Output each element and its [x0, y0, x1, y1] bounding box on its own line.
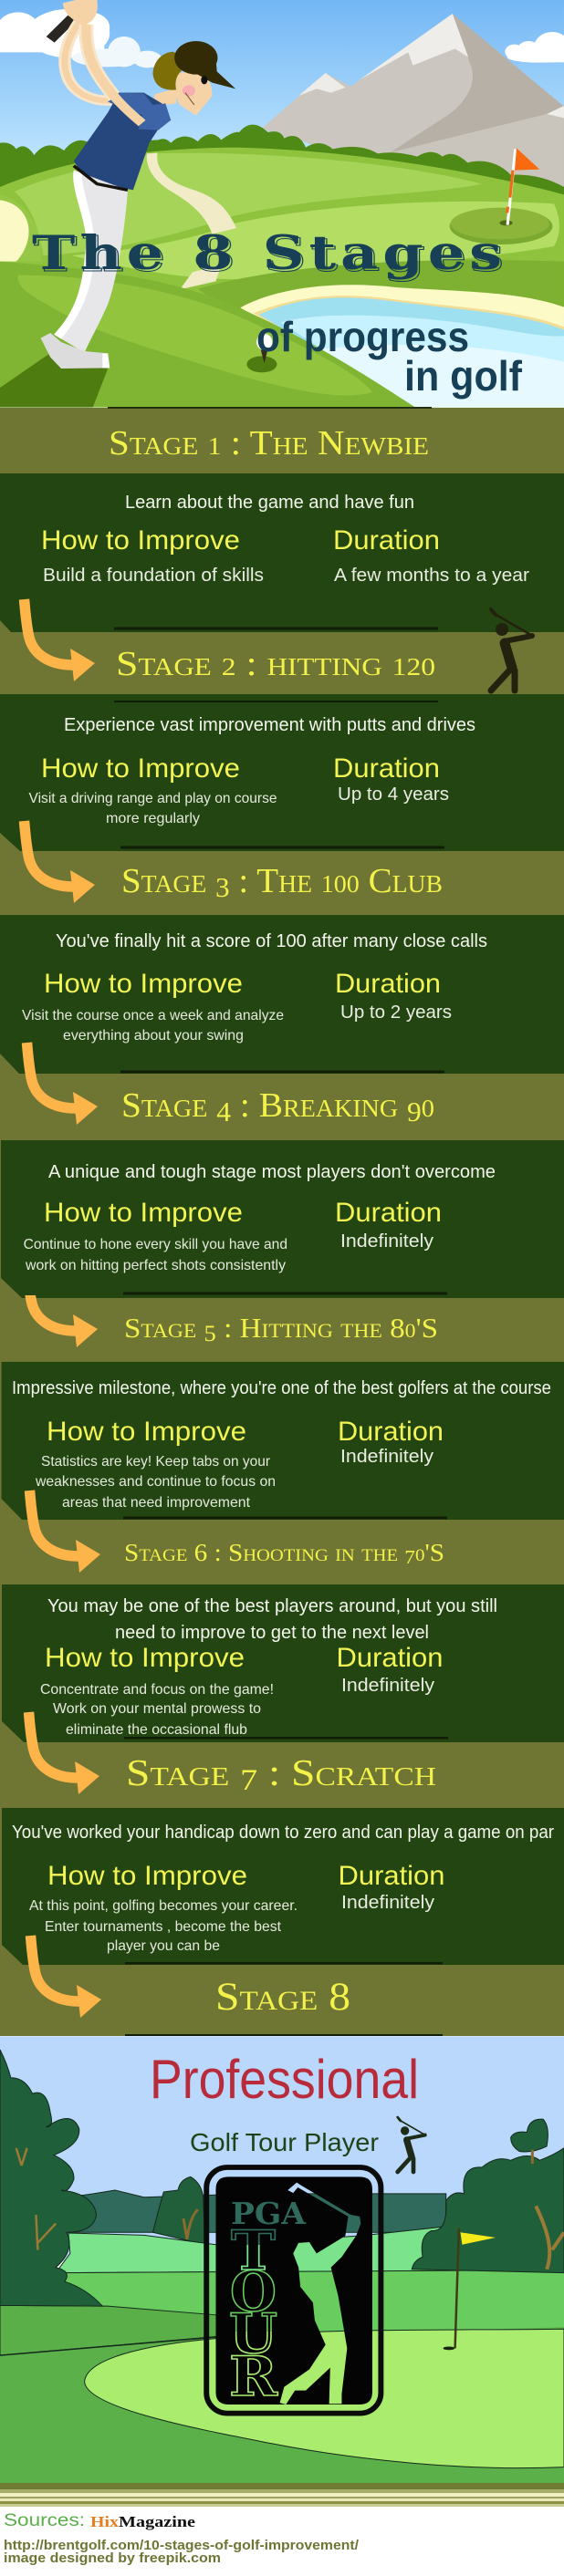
panel: stage 6 details: How to Improve — [45, 1643, 245, 1673]
panel: stage 3 details: everything about your swing — [63, 1028, 244, 1044]
sources line — [4, 2511, 196, 2530]
arrow: stage 5 to 6 — [29, 1491, 100, 1573]
panel: stage 7 details: Indefinitely — [341, 1893, 434, 1913]
panel: stage 2 details: How to Improve — [41, 753, 240, 784]
subtitle: of progress in golf — [256, 313, 523, 400]
panel: stage 7 details — [0, 1808, 564, 1965]
arrow: stage 3 to 4 — [27, 1043, 98, 1125]
panel: stage 5 details — [0, 1362, 564, 1520]
clouds — [0, 9, 564, 68]
panel: stage 4 details: Duration — [335, 1198, 442, 1228]
putting green and flag — [449, 213, 553, 244]
stage 1 heading band — [0, 407, 564, 473]
panel: stage 1 details: Duration — [333, 525, 440, 556]
source credits: image designed by freepik.com — [4, 2550, 221, 2566]
panel: stage 5 details: weaknesses and continue to focus on — [35, 1474, 276, 1490]
panel: stage 2 details: Visit a driving range and play on course — [29, 791, 277, 806]
panel: stage 2 details: Experience vast improvement with putts and drives — [64, 715, 475, 735]
panel: stage 2 details — [0, 694, 564, 851]
stage 1 heading band: Stage 1 : The Newbie — [109, 424, 429, 462]
panel: stage 5 details: Duration — [338, 1417, 444, 1447]
stage 4 heading band: 9 — [407, 1096, 422, 1127]
panel: stage 4 details: How to Improve — [44, 1198, 243, 1228]
panel: stage 7 details: player you can be — [107, 1938, 220, 1954]
PGA Tour logo: PGA — [231, 2196, 306, 2231]
panel: stage 6 details: Indefinitely — [341, 1676, 434, 1696]
sources line: Magazine — [119, 2513, 196, 2530]
stage 4 heading band: Stage — [121, 1086, 204, 1125]
panel: stage 6 details: eliminate the occasional flub — [66, 1722, 247, 1738]
sky — [0, 0, 564, 155]
panel: stage 5 details: Indefinitely — [340, 1447, 433, 1467]
stage 4 heading band — [0, 1074, 564, 1140]
arrow: stage 1 to 2 — [24, 599, 95, 681]
source credits: http://brentgolf.com/10-stages-of-golf-improvement/ — [4, 2538, 360, 2553]
panel: stage 4 details: Indefinitely — [340, 1231, 433, 1252]
title: The 8 Stages: The 8 Stages — [32, 226, 507, 281]
arrow: stage 4 to 5 — [25, 1295, 98, 1347]
stage 6 heading band: 7 — [404, 1546, 415, 1568]
panel: stage 1 details: A few months to a year — [334, 566, 529, 586]
cart path — [147, 153, 236, 234]
stage 6 heading band — [0, 1520, 564, 1584]
panel: stage 4 details — [0, 1140, 564, 1298]
stage 2 heading band — [0, 632, 564, 694]
panel: stage 3 details: Visit the course once a week and analyze — [22, 1008, 284, 1023]
title: The 8 Stages: The 8 Stages — [34, 228, 508, 283]
hero illustration — [0, 0, 564, 408]
foreground hill — [0, 262, 415, 408]
panel: stage 6 details: need to improve to get to the next level — [115, 1623, 429, 1643]
mid tree — [153, 2176, 205, 2245]
stage 5 heading band — [0, 1298, 564, 1362]
yellow flag — [455, 2228, 459, 2348]
text: Golf Tour Player: Golf Tour Player — [190, 2128, 379, 2156]
stage 4 heading band: : Breaking — [231, 1086, 407, 1125]
footer stripes — [0, 2483, 564, 2507]
panel: stage 6 details: You may be one of the best players around, but you still — [47, 1596, 497, 1616]
subtitle: of progress in golf: of progress — [256, 313, 469, 360]
panel: stage 2 details: Up to 4 years — [338, 784, 449, 805]
PGA Tour logo: T — [231, 2219, 276, 2283]
right tree — [412, 2148, 564, 2273]
bunker — [0, 194, 41, 262]
panel: stage 3 details: Up to 2 years — [340, 1002, 452, 1023]
icon: small golfer silhouette — [398, 2117, 425, 2172]
panel: stage 3 details: You've finally hit a score of 100 after many close calls — [56, 931, 487, 951]
fairway — [0, 148, 564, 408]
panel: stage 6 details: Concentrate and focus on the game! — [40, 1682, 274, 1698]
mountains — [263, 73, 350, 139]
fields — [0, 2270, 564, 2342]
stage 7 heading band — [0, 1742, 564, 1808]
arrow: stage 7 to 8 — [31, 1936, 101, 2018]
panel: stage 6 details — [0, 1584, 564, 1742]
panel: stage 1 details: How to Improve — [41, 525, 240, 556]
stage 6 heading band: 0 — [415, 1546, 424, 1565]
panel: stage 6 details: Work on your mental prowess to — [53, 1701, 261, 1717]
tee — [246, 356, 277, 372]
stage 5 heading band: 0'S — [405, 1312, 436, 1344]
panel: stage 7 details: How to Improve — [47, 1861, 247, 1891]
stage 7 heading band: 7 — [240, 1764, 257, 1797]
stage 5 heading band: : Hitting the 8 — [216, 1312, 405, 1344]
PGA Tour logo: O — [230, 2260, 277, 2324]
stage 3 heading band: Stage — [121, 862, 204, 900]
panel: stage 5 details: How to Improve — [47, 1417, 246, 1447]
panel: stage 7 details: Enter tournaments , become the best — [45, 1919, 282, 1935]
panel: stage 5 details: areas that need improvement — [62, 1495, 251, 1511]
distant trees — [68, 2190, 446, 2232]
stage 8 heading band: Stage 8 — [215, 1976, 350, 2019]
light field — [56, 2227, 441, 2273]
stage 3 heading band: 100 Club — [321, 862, 441, 900]
panel: stage 1 details: Learn about the game and have fun — [125, 493, 414, 513]
panel: stage 4 details: work on hitting perfect shots consistently — [25, 1258, 286, 1273]
stage 3 heading band: : The — [230, 862, 321, 900]
panel: stage 3 details — [0, 915, 564, 1074]
arrow: stage 2 to 3 — [24, 821, 95, 903]
panel: stage 7 details: Duration — [338, 1861, 445, 1891]
closing scene — [0, 2036, 564, 2484]
putting surface — [85, 2329, 564, 2468]
stage 3 heading band: 3 — [215, 872, 230, 903]
panel: stage 6 details: Duration — [336, 1643, 444, 1673]
icon: golfer silhouette at stage 2 — [491, 609, 533, 691]
beach and water — [240, 285, 564, 327]
stage 4 heading band: 4 — [216, 1096, 231, 1127]
stage 8 heading band — [0, 1965, 564, 2036]
stage 5 heading band: Stage — [124, 1312, 192, 1344]
sources line: Hix — [90, 2513, 120, 2530]
PGA Tour logo — [206, 2167, 381, 2414]
left tree — [0, 2050, 102, 2306]
panel: stage 3 details: Duration — [335, 969, 441, 999]
tree line — [0, 124, 564, 195]
stage 5 heading band: 5 — [204, 1322, 216, 1346]
PGA Tour logo: U — [229, 2302, 277, 2366]
arrow: stage 6 to 7 — [29, 1712, 99, 1794]
panel: stage 2 details: more regularly — [106, 811, 200, 826]
source credits — [4, 2538, 360, 2566]
panel: stage 7 details: At this point, golfing becomes your career. — [29, 1898, 298, 1914]
golfer — [50, 18, 72, 39]
stage 6 heading band: 'S — [424, 1539, 443, 1566]
panel: stage 1 details — [0, 473, 564, 632]
stage 4 heading band: 0 — [422, 1095, 434, 1122]
sky — [0, 2036, 564, 2261]
subtitle: of progress in golf: in golf — [404, 352, 523, 400]
panel: stage 4 details: A unique and tough stage most players don't overcome — [48, 1162, 496, 1182]
stage 6 heading band: Stage 6 : Shooting in the — [124, 1539, 377, 1566]
panel: stage 2 details: Duration — [333, 753, 440, 784]
heading: Professional: Professional — [150, 2049, 419, 2110]
panel: stage 3 details: How to Improve — [44, 969, 243, 999]
stage 7 heading band: : Scratch — [257, 1751, 436, 1793]
stage 2 heading band: Stage 2 : hitting 120 — [116, 645, 435, 683]
stage 7 heading band: Stage — [126, 1751, 215, 1793]
panel: stage 1 details: Build a foundation of skills — [43, 566, 264, 586]
stage 3 heading band — [0, 851, 564, 915]
sources line: Sources: — [4, 2511, 85, 2530]
panel: stage 4 details: Continue to hone every skill you have and — [24, 1237, 287, 1252]
panel: stage 5 details: Statistics are key! Keep tabs on your — [41, 1454, 271, 1470]
PGA Tour logo: R — [229, 2345, 278, 2409]
